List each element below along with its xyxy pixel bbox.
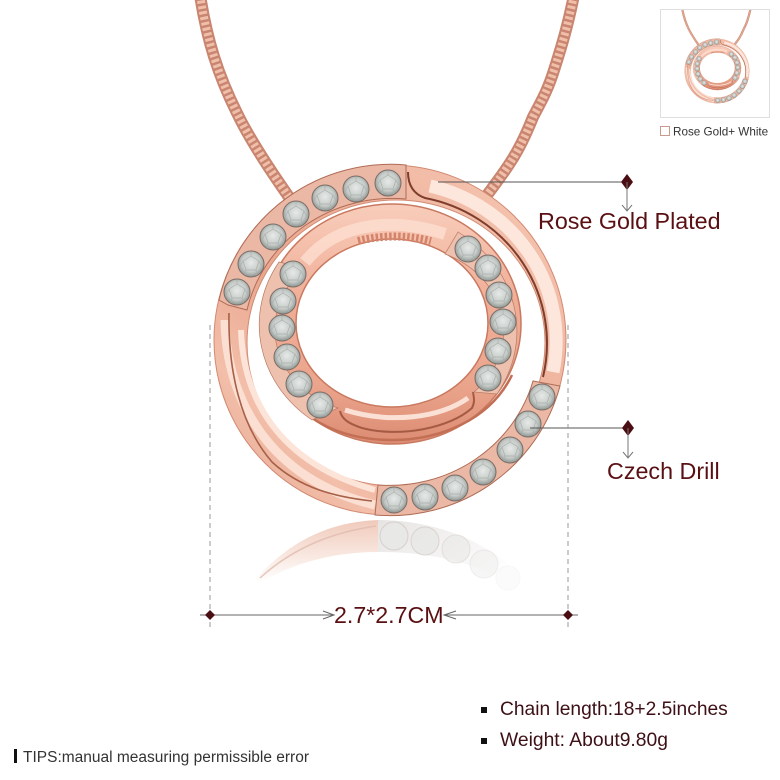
dimension: 2.7*2.7CM: 2.7*2.7CM	[334, 602, 444, 628]
tips note: TIPS:manual measuring permissible error	[23, 749, 309, 766]
swatch label: Rose Gold+ White: Rose Gold+ White	[673, 126, 768, 138]
callout: Czech Drill: Czech Drill	[607, 458, 720, 484]
pendant necklace	[200, 0, 574, 516]
dimension: 2.7*2.7CM	[200, 325, 578, 628]
callout: Rose Gold Plated: Rose Gold Plated	[538, 208, 721, 234]
pendant reflection	[253, 520, 527, 590]
callout: Rose Gold Plated	[438, 174, 721, 234]
spec: weight: Weight: About9.80g	[500, 730, 668, 751]
callout: Czech Drill	[530, 420, 720, 484]
thumbnail: colour option	[660, 7, 770, 118]
spec: chain length: Chain length:18+2.5inches	[500, 699, 728, 720]
